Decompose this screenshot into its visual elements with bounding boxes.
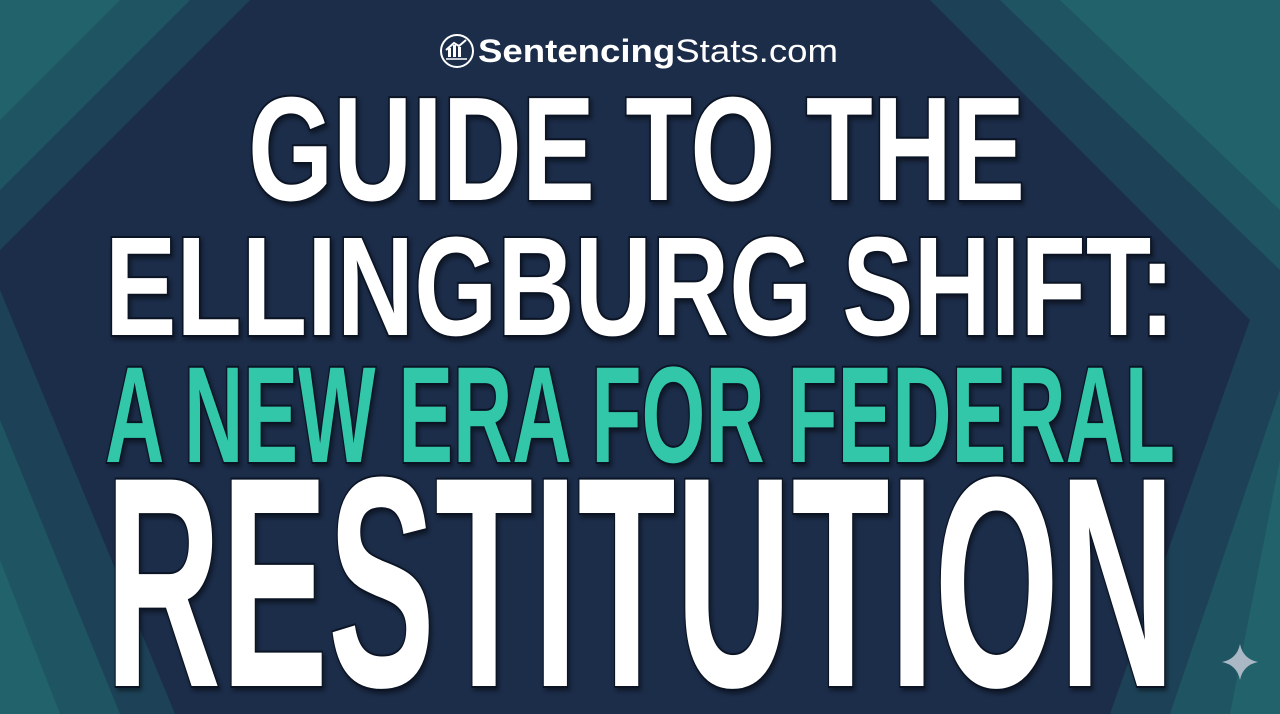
- title line 1: GUIDE TO THE: [248, 67, 1025, 232]
- title: [105, 67, 1175, 714]
- logo text: Sentencing Stats.com: [478, 33, 838, 69]
- icon: sparkle: [1222, 644, 1258, 680]
- icon: chart in circle: [441, 35, 473, 67]
- logo: [441, 33, 838, 69]
